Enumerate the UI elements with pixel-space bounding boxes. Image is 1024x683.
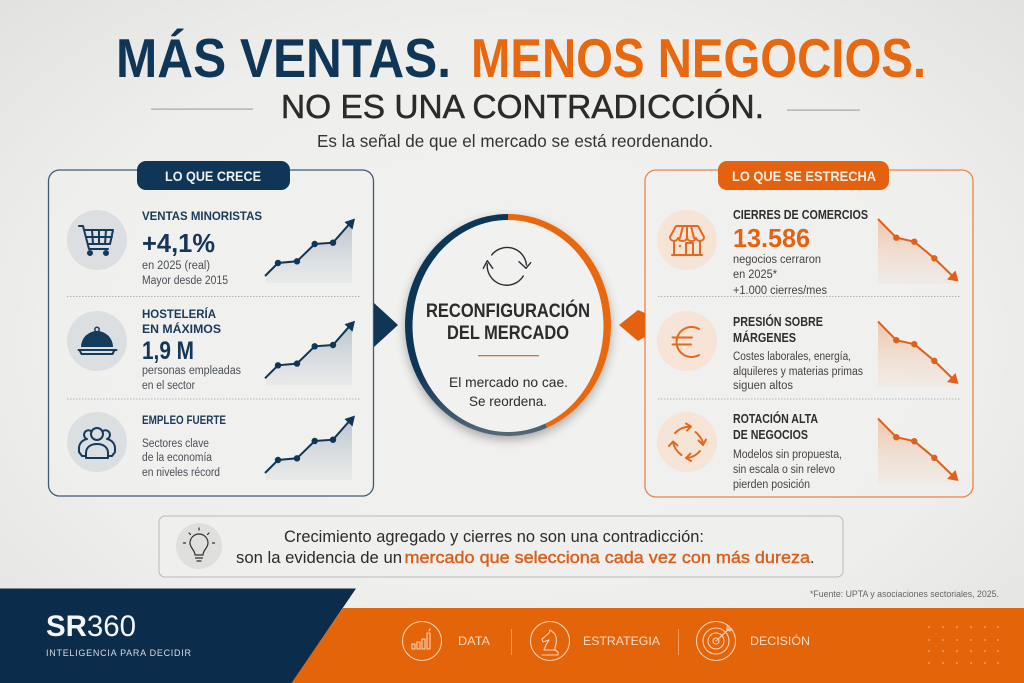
tag: lo que crece bbox=[137, 161, 290, 190]
footer: orange band bbox=[291, 608, 1024, 683]
icon: cycle arrows bbox=[483, 247, 531, 285]
tag: lo que se estrecha: LO QUE SE ESTRECHA bbox=[732, 168, 876, 184]
chart: rotación down bbox=[878, 418, 958, 484]
text: cierres de comercios: en 2025* bbox=[733, 269, 777, 281]
text: presión sobre márgenes: PRESIÓN SOBRE bbox=[733, 314, 823, 329]
text: presión sobre márgenes: MÁRGENES bbox=[733, 330, 796, 345]
text: ventas minoristas bbox=[142, 209, 262, 287]
text: cierres de comercios: +1.000 cierres/mes bbox=[733, 285, 827, 297]
text: cierres de comercios: negocios cerraron bbox=[733, 254, 821, 266]
footer: navy block with logo bbox=[0, 588, 356, 683]
text: hostelería: en el sector bbox=[142, 380, 195, 392]
text: rotación alta: Modelos sin propuesta, bbox=[733, 449, 842, 461]
chart: empleo up bbox=[265, 416, 355, 480]
text: el mercado no cae: El mercado no cae. bbox=[449, 374, 568, 390]
icon: rotation arrows bbox=[657, 412, 717, 472]
data: DATA bbox=[458, 634, 490, 648]
decisión bbox=[696, 622, 810, 660]
panel: lo que crece bbox=[48, 161, 374, 496]
text: ventas minoristas: Mayor desde 2015 bbox=[142, 275, 228, 287]
text: empleo fuerte: EMPLEO FUERTE bbox=[142, 413, 226, 427]
tag: lo que se estrecha bbox=[718, 161, 889, 190]
text: hostelería: personas empleadas bbox=[142, 365, 241, 377]
text: cierres de comercios: 13.586 bbox=[733, 223, 810, 253]
text: callout message: mercado que selecciona cada vez con más dureza bbox=[404, 549, 811, 567]
text: empleo fuerte bbox=[142, 413, 226, 479]
data bbox=[402, 622, 490, 660]
text: rotación alta: pierden posición bbox=[733, 479, 810, 491]
estrategia bbox=[530, 622, 660, 660]
text: rotación alta bbox=[733, 411, 842, 491]
text: empleo fuerte: en niveles récord bbox=[142, 467, 220, 479]
text: callout message: son la evidencia de un bbox=[236, 549, 402, 567]
title bbox=[116, 27, 926, 89]
text: empleo fuerte: de la economía bbox=[142, 452, 213, 464]
text: hostelería bbox=[142, 306, 241, 392]
chart: cierres down bbox=[878, 219, 958, 284]
callout bbox=[159, 516, 843, 577]
arrow: orange bbox=[619, 310, 645, 341]
text: hostelería: HOSTELERÍA bbox=[142, 306, 216, 321]
text: presión sobre márgenes bbox=[733, 314, 863, 392]
text: presión sobre márgenes: siguen altos bbox=[733, 380, 793, 392]
source note: *Fuente: UPTA y asociaciones sectoriales, 2025. bbox=[810, 589, 999, 599]
text: callout message bbox=[236, 528, 815, 567]
icon: cart bbox=[67, 210, 127, 270]
subtitle: no es una contradicción: NO ES UNA CONTRADICCIÓN. bbox=[281, 88, 764, 125]
text: hostelería: EN MÁXIMOS bbox=[142, 321, 221, 336]
text: rotación alta: ROTACIÓN ALTA bbox=[733, 411, 818, 426]
chart: márgenes down bbox=[878, 322, 958, 386]
text: empleo fuerte: Sectores clave bbox=[142, 438, 209, 450]
text: cierres de comercios: CIERRES DE COMERCIOS bbox=[733, 208, 868, 222]
text: presión sobre márgenes: Costes laborales, energía, bbox=[733, 351, 851, 363]
text: rotación alta: DE NEGOCIOS bbox=[733, 428, 808, 442]
text: hostelería: 1,9 M bbox=[142, 337, 194, 365]
text: ventas minoristas: en 2025 (real) bbox=[142, 260, 210, 272]
text: rotación alta: sin escala o sin relevo bbox=[733, 464, 835, 476]
text: ventas minoristas: +4,1% bbox=[142, 228, 215, 258]
estrategia: ESTRATEGIA bbox=[583, 634, 660, 648]
text: cierres de comercios bbox=[733, 208, 868, 297]
decisión: DECISIÓN bbox=[750, 633, 810, 648]
text: callout message: Crecimiento agregado y cierres no son una contradicción: bbox=[284, 528, 704, 546]
logo: SR360 bbox=[46, 610, 136, 643]
text: se reordena: Se reordena. bbox=[469, 393, 547, 409]
text: callout message: . bbox=[810, 549, 815, 567]
text: presión sobre márgenes: alquileres y materias primas bbox=[733, 366, 863, 378]
chart: hostelería up bbox=[265, 321, 355, 385]
ring bbox=[405, 214, 611, 436]
text: reconfiguración: RECONFIGURACIÓN bbox=[426, 298, 590, 322]
text: del mercado: DEL MERCADO bbox=[447, 322, 569, 344]
central circle bbox=[405, 214, 611, 436]
text: ventas minoristas: VENTAS MINORISTAS bbox=[142, 209, 262, 223]
icon: people bbox=[67, 412, 127, 472]
chart: ventas up bbox=[265, 218, 355, 283]
icon: store bbox=[657, 210, 717, 270]
logo tagline: INTELIGENCIA PARA DECIDIR bbox=[46, 648, 192, 658]
icon: euro bbox=[657, 311, 717, 371]
icon: light bulb bbox=[176, 523, 222, 569]
tag: lo que crece: LO QUE CRECE bbox=[165, 168, 261, 184]
tagline: Es la señal de que el mercado se está reordenando. bbox=[317, 131, 713, 151]
dot pattern bbox=[928, 626, 999, 664]
arrow: navy bbox=[374, 303, 398, 347]
title: MÁS VENTAS. bbox=[116, 27, 451, 89]
panel: lo que se estrecha bbox=[645, 161, 973, 497]
icon: cloche bbox=[67, 311, 127, 371]
title: MENOS NEGOCIOS. bbox=[471, 27, 926, 89]
